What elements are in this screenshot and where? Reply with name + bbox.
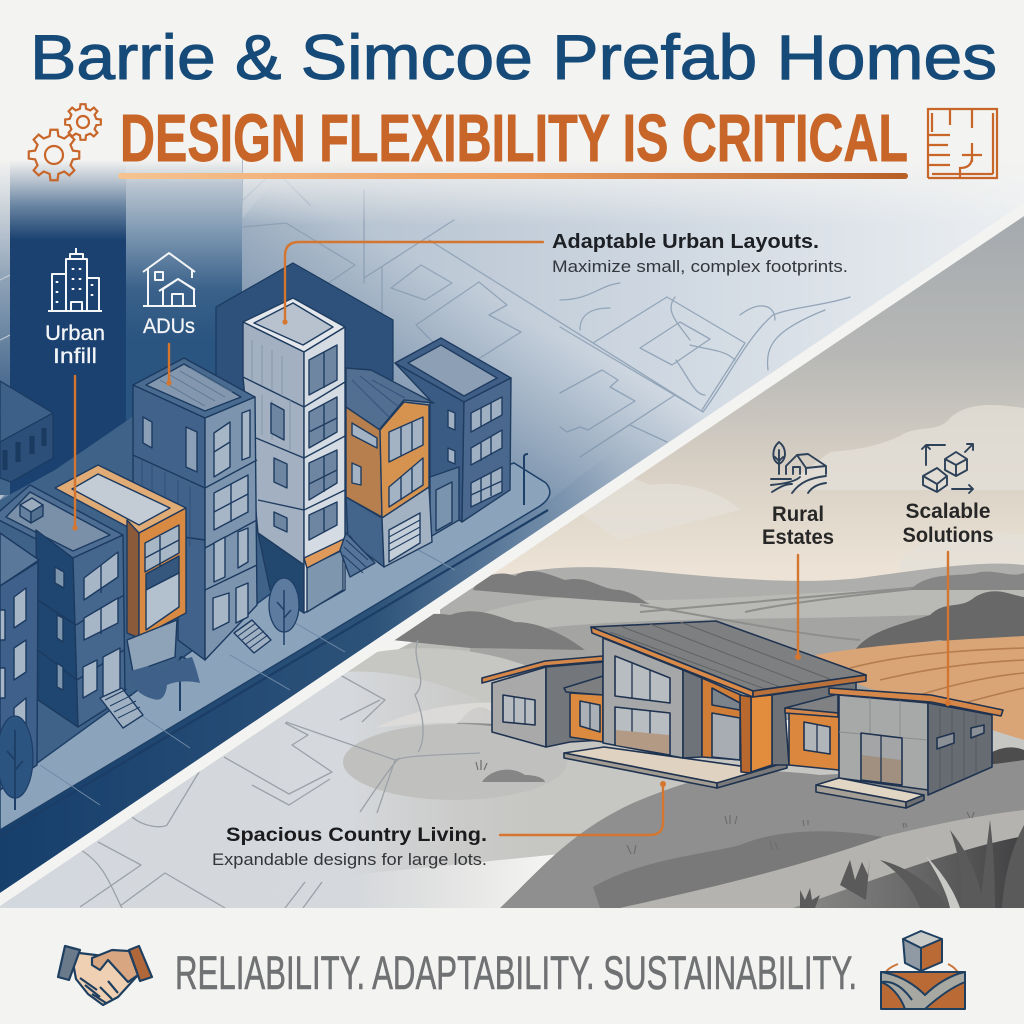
house: left wing	[482, 656, 603, 747]
map linework: rural plots	[80, 640, 480, 908]
house: main windows	[615, 656, 670, 755]
sidewalk	[0, 463, 550, 830]
icon: handshake	[58, 946, 152, 1005]
leader lines	[72, 242, 951, 835]
tree lines	[394, 571, 1024, 764]
foreground dark slope	[500, 760, 1024, 908]
building: rear right	[395, 338, 511, 537]
trees and shrubs	[0, 578, 299, 810]
label: scalable solutions	[902, 500, 994, 547]
house: main wall	[603, 638, 683, 758]
building: ADU stacked module	[133, 358, 271, 660]
foreground grass bank	[793, 836, 1024, 908]
label: ADUs: ADUs	[143, 315, 195, 338]
distant hills	[440, 564, 1024, 615]
label: urban infill: Urban	[45, 322, 105, 345]
tall navy backdrop columns	[0, 155, 242, 525]
label: scalable solutions: Scalable	[906, 500, 990, 523]
diagonal divider	[0, 203, 1024, 906]
callout text: adaptable urban layouts: Adaptable Urban Layouts.	[552, 231, 819, 253]
pale ground band	[377, 702, 492, 728]
building: orange-framed infill	[55, 465, 186, 672]
title: Barrie & Simcoe Prefab Homes	[30, 23, 997, 93]
label: rural estates: Rural	[772, 503, 824, 526]
subtitle underline	[118, 173, 908, 179]
dark rear mass	[215, 262, 394, 390]
mid-ground meadow	[0, 648, 1024, 910]
icon: rural estate	[771, 442, 826, 493]
panel: urban scene	[0, 155, 1024, 905]
grass tufts	[476, 760, 974, 854]
icon: urban infill towers	[48, 248, 102, 311]
callout text: adaptable urban layouts: Maximize small, complex footprints.	[552, 257, 848, 276]
curb line	[50, 509, 548, 807]
left background building	[0, 381, 53, 482]
sky	[492, 216, 1024, 581]
building: front left	[0, 485, 143, 728]
house: porch slab	[564, 747, 787, 788]
callout text: spacious country living: Expandable designs for large lots.	[212, 850, 487, 869]
block ground	[0, 417, 347, 762]
label: urban infill: Infill	[53, 345, 97, 368]
callout text: spacious country living: Spacious Country Living.	[226, 824, 487, 846]
icon: gears	[29, 104, 101, 180]
house: rural modular home	[482, 621, 1003, 808]
bottom band	[0, 908, 1024, 1024]
callout text: spacious country living	[212, 824, 487, 869]
label: scalable solutions: Solutions	[902, 524, 994, 547]
grey hollow	[343, 724, 503, 800]
building: tall light stack	[243, 298, 375, 613]
house: main roof	[591, 621, 866, 697]
low shrub	[482, 770, 545, 782]
clouds	[582, 405, 1024, 524]
house: right module	[816, 688, 1003, 808]
street lamps	[180, 454, 528, 711]
label: rural estates	[762, 503, 834, 549]
sidewalk joints	[40, 540, 455, 805]
icon: module over land	[881, 931, 965, 1009]
foreground dark ridge	[593, 831, 883, 908]
foreground sand strip	[620, 810, 1024, 908]
road	[0, 494, 558, 893]
panel: rural scene	[0, 200, 1024, 910]
callout text: adaptable urban layouts	[552, 231, 848, 276]
label: rural estates: Estates	[762, 526, 834, 549]
building: far left	[0, 533, 39, 790]
icon: ADU houses	[143, 253, 196, 306]
blueprint ground	[0, 672, 496, 908]
street ground haze	[0, 208, 690, 646]
icon: scalable cubes	[922, 444, 973, 493]
grass blades	[800, 820, 1024, 908]
icon: floor plan	[928, 109, 997, 178]
orange field	[815, 636, 1024, 740]
label: urban infill	[46, 324, 104, 364]
building: orange gable house	[346, 368, 434, 567]
map linework: urban lots	[243, 170, 850, 457]
map shading overlay at top	[243, 155, 1024, 225]
